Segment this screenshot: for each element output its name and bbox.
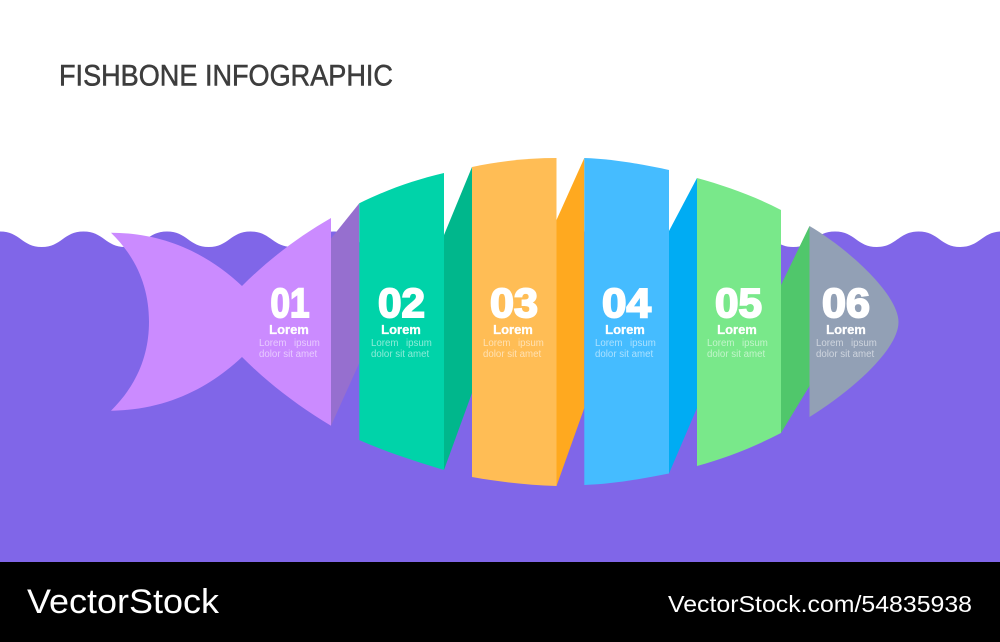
label 06: Lorem [816, 338, 843, 349]
label 01: Lorem [269, 322, 309, 337]
title: FISHBONE INFOGRAPHIC [59, 59, 393, 93]
label 04 [595, 280, 656, 360]
head segment 06 [810, 226, 898, 417]
label 02 [371, 280, 432, 360]
label 05: 05 [715, 280, 762, 326]
footer url: VectorStock.com/54835938 [668, 591, 972, 617]
footer bar [0, 562, 1000, 642]
label 03: dolor sit amet [483, 349, 541, 360]
label 06: Lorem [826, 322, 866, 337]
label 03: Lorem [493, 322, 533, 337]
label 04: ipsum [630, 338, 656, 349]
label 06: 06 [822, 280, 870, 326]
label 04: 04 [602, 280, 651, 326]
label 02: Lorem [381, 322, 421, 337]
water with waves [0, 232, 1000, 562]
label 05: Lorem [717, 322, 757, 337]
label 01: dolor sit amet [259, 349, 317, 360]
label 06: ipsum [851, 338, 877, 349]
label 02: ipsum [406, 338, 432, 349]
fold 5 [781, 226, 810, 433]
panel 03 [472, 158, 556, 486]
label 01: ipsum [294, 338, 320, 349]
label 02: Lorem [371, 338, 398, 349]
panel 05 [697, 178, 781, 466]
fold 1 [331, 203, 359, 426]
label 01: 01 [270, 280, 310, 326]
label 01: Lorem [259, 338, 286, 349]
label 03 [483, 280, 544, 360]
label 05: ipsum [742, 338, 768, 349]
label 06 [816, 280, 877, 360]
footer logo: VectorStock [27, 583, 220, 621]
label 05 [707, 280, 768, 360]
label 02: 02 [378, 280, 425, 326]
fold 4 [669, 178, 697, 474]
label 02: dolor sit amet [371, 349, 429, 360]
label 04: Lorem [605, 322, 645, 337]
fold 3 [556, 158, 584, 486]
label 03: 03 [490, 280, 538, 326]
label 05: dolor sit amet [707, 349, 765, 360]
label 04: Lorem [595, 338, 622, 349]
panel 02 [359, 173, 444, 470]
fold 2 [444, 167, 472, 470]
label 06: dolor sit amet [816, 349, 874, 360]
label 05: Lorem [707, 338, 734, 349]
tail segment 01 [111, 218, 331, 426]
label 03: Lorem [483, 338, 510, 349]
label 04: dolor sit amet [595, 349, 653, 360]
fish [111, 158, 898, 486]
label 03: ipsum [518, 338, 544, 349]
panel 04 [584, 158, 669, 485]
label 01 [259, 280, 320, 360]
